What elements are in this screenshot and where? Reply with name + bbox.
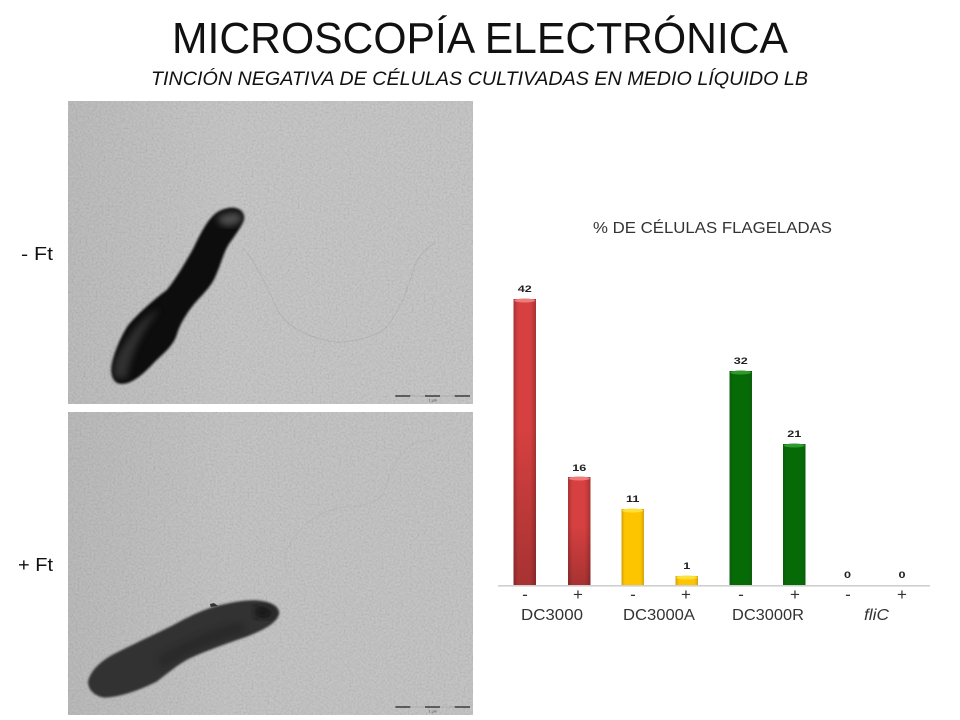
value: fliC plus, 0: 0: [898, 570, 906, 581]
flagellum: [285, 440, 433, 572]
bar chart: [498, 284, 930, 587]
flagellum: [243, 242, 435, 342]
bar: DC3000R minus, 32: [730, 356, 752, 585]
label: plus Ft: + Ft: [18, 555, 53, 575]
scale bar: [395, 395, 470, 397]
treatment signs: +: [573, 585, 583, 604]
treatment signs: +: [790, 585, 800, 604]
treatment signs: [522, 585, 907, 604]
strain labels: DC3000A: [623, 607, 696, 624]
micrograph: cell with Ft: 1 µm: [429, 709, 437, 713]
bar: DC3000A minus, 11: 11: [626, 494, 639, 505]
treatment signs: +: [681, 585, 691, 604]
axis line: [498, 585, 930, 587]
strain labels: [521, 607, 890, 624]
treatment signs: -: [845, 585, 851, 604]
subtitle: TINCIÓN NEGATIVA DE CÉLULAS CULTIVADAS EN MEDIO LÍQUIDO LB: [151, 68, 808, 90]
treatment signs: -: [630, 585, 636, 604]
bar: DC3000R plus, 21: [783, 429, 806, 585]
bar: DC3000R minus, 32: 32: [734, 356, 748, 367]
bar: DC3000 minus, 42: 42: [518, 284, 532, 295]
treatment signs: -: [738, 585, 744, 604]
bar: DC3000 minus, 42: [514, 284, 536, 585]
strain labels: DC3000: [521, 607, 583, 624]
bacterial cell body: [111, 208, 244, 384]
value: fliC minus, 0: 0: [844, 570, 851, 581]
treatment signs: -: [522, 585, 528, 604]
strain labels: fliC: [864, 607, 890, 624]
strain labels: DC3000R: [732, 607, 804, 624]
bar: DC3000 plus, 16: 16: [572, 463, 586, 474]
micrograph: cell without Ft: [68, 101, 473, 404]
treatment signs: +: [897, 585, 907, 604]
bar: DC3000A plus, 1: [676, 561, 698, 585]
bar: DC3000A plus, 1: 1: [683, 561, 690, 572]
title: MICROSCOPÍA ELECTRÓNICA: [172, 14, 789, 63]
bar: DC3000 plus, 16: [568, 463, 590, 585]
micrograph: cell without Ft: 1 µm: [429, 399, 437, 403]
scale bar: [395, 706, 470, 708]
micrograph: cell with Ft: [68, 412, 473, 715]
bar: DC3000R plus, 21: 21: [787, 429, 801, 440]
label: minus Ft: - Ft: [21, 244, 53, 264]
bacterial cell body: [88, 600, 279, 698]
bar: DC3000A minus, 11: [622, 494, 644, 585]
chart title: % DE CÉLULAS FLAGELADAS: [593, 220, 832, 237]
